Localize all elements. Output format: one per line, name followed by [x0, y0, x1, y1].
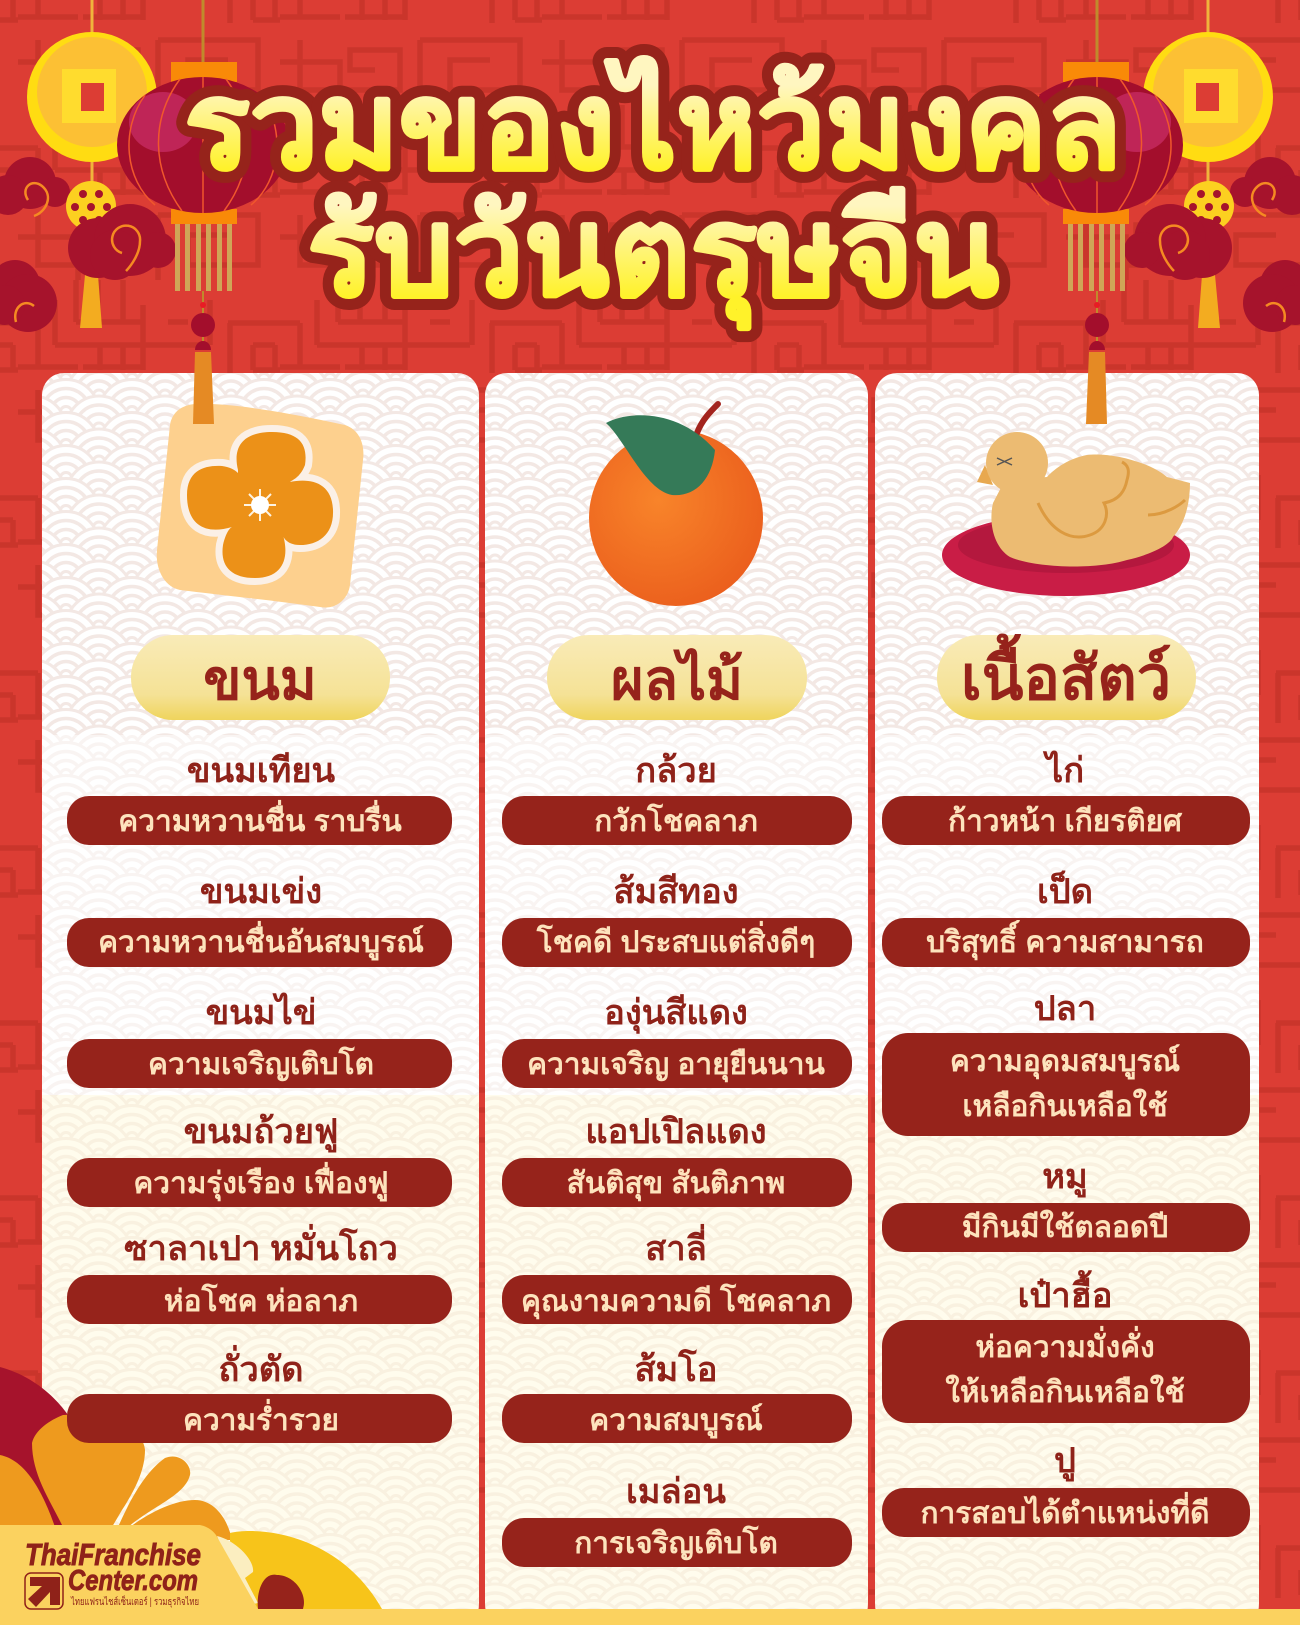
- item: เมล่อน: การเจริญเติบโต: [574, 1525, 778, 1561]
- logo: ThaiFranchise: [25, 1537, 201, 1572]
- item: ซาลาเปา หมั่นโถว: [67, 1223, 452, 1324]
- icon: orange: [589, 404, 763, 606]
- item: ขนมถ้วยฟู: ขนมถ้วยฟู: [184, 1113, 338, 1153]
- item: เมล่อน: [502, 1473, 852, 1567]
- title: รวมของไหว้มงคล: [184, 57, 1122, 194]
- item: หมู: มีกินมีใช้ตลอดปี: [962, 1209, 1168, 1244]
- item: ไก่: [882, 750, 1250, 845]
- item: แอปเปิลแดง: แอปเปิลแดง: [585, 1113, 767, 1151]
- item: ขนมถ้วยฟู: [67, 1113, 452, 1207]
- item: ส้มโอ: ความสมบูรณ์: [589, 1403, 763, 1439]
- item: เมล่อน: เมล่อน: [626, 1473, 726, 1511]
- hanging ornaments: left coin, lantern and clouds: [0, 0, 289, 424]
- decoration: flower corner: [0, 1367, 382, 1609]
- icon: boiled chicken on plate: [942, 432, 1190, 596]
- item: ขนมไข่: [67, 992, 452, 1088]
- bottom bar: [0, 1609, 1300, 1625]
- item: ส้มสีทอง: [502, 872, 852, 967]
- item: ขนมเทียน: ขนมเทียน: [187, 751, 336, 790]
- panel: meat background: [875, 373, 1259, 1625]
- item: ขนมไข่: ขนมไข่: [206, 992, 316, 1032]
- item: ขนมถ้วยฟู: ความรุ่งเรือง เฟื่องฟู: [133, 1161, 389, 1202]
- item: เป็ด: บริสุทธิ์ ความสามารถ: [926, 919, 1204, 960]
- item: กล้วย: กล้วย: [635, 752, 717, 790]
- item: ส้มโอ: [502, 1348, 852, 1443]
- item: ส้มโอ: ส้มโอ: [634, 1348, 718, 1389]
- item: ไก่: ก้าวหน้า เกียรติยศ: [948, 805, 1183, 838]
- item: เป๋าฮื้อ: [882, 1270, 1250, 1423]
- item: เป๋าฮื้อ: ให้เหลือกินเหลือใช้: [945, 1374, 1185, 1409]
- title: [184, 57, 1122, 330]
- heading: fruit: [547, 635, 807, 720]
- title: รวมของไหว้มงคล: [184, 57, 1122, 194]
- item: หมู: [882, 1158, 1250, 1252]
- item: ขนมเข่ง: [67, 873, 452, 967]
- title: รับวันตรุษจีน: [307, 183, 999, 330]
- item: ซาลาเปา หมั่นโถว: ห่อโชค ห่อลาภ: [164, 1283, 358, 1318]
- item: ส้มสีทอง: ส้มสีทอง: [613, 872, 739, 911]
- logo: Center.com: [68, 1565, 198, 1597]
- item: องุ่นสีแดง: ความเจริญ อายุยืนนาน: [527, 1048, 825, 1082]
- heading: sweets: ขนม: [203, 648, 317, 711]
- item: ส้มสีทอง: โชคดี ประสบแต่สิ่งดีๆ: [536, 920, 815, 959]
- item: องุ่นสีแดง: [502, 993, 852, 1088]
- item: เป็ด: เป็ด: [1037, 869, 1093, 911]
- hanging ornaments: right coin, lantern and clouds: [1011, 0, 1300, 424]
- panel: fruit background: [485, 373, 868, 1625]
- logo: [0, 1525, 258, 1625]
- icon: logo arrow: [25, 1573, 63, 1609]
- item: ปลา: [882, 990, 1250, 1136]
- item: ปู: ปู: [1054, 1442, 1076, 1482]
- heading: sweets: [131, 635, 390, 720]
- item: ถั่วตัด: [67, 1344, 452, 1443]
- item: ขนมเทียน: ความหวานชื่น ราบรื่น: [118, 799, 402, 838]
- item: ปลา: ความอุดมสมบูรณ์: [950, 1044, 1181, 1080]
- item: เป็ด: [882, 869, 1250, 967]
- heading: meat: เนื้อสัตว์: [961, 633, 1171, 712]
- panel: sweets background: [42, 373, 479, 1625]
- logo: ไทยแฟรนไชส์เซ็นเตอร์ | รวมธุรกิจไทย: [70, 1594, 199, 1608]
- item: ปลา: ปลา: [1034, 990, 1096, 1028]
- item: ปลา: เหลือกินเหลือใช้: [962, 1088, 1168, 1123]
- item: ขนมไข่: ความเจริญเติบโต: [148, 1046, 374, 1082]
- item: แอปเปิลแดง: สันติสุข สันติภาพ: [567, 1167, 785, 1201]
- item: กล้วย: กวักโชคลาภ: [594, 803, 758, 838]
- item: ปู: [882, 1442, 1250, 1537]
- item: ขนมเข่ง: ขนมเข่ง: [200, 873, 322, 911]
- item: ถั่วตัด: ความร่ำรวย: [183, 1398, 339, 1437]
- item: เป๋าฮื้อ: เป๋าฮื้อ: [1018, 1270, 1112, 1315]
- heading: fruit: ผลไม้: [611, 647, 743, 711]
- item: สาลี่: [502, 1223, 852, 1324]
- panel tint: cream lower area and light list area: [42, 735, 1259, 1625]
- item: กล้วย: [502, 752, 852, 845]
- item: สาลี่: สาลี่: [645, 1223, 707, 1268]
- item: ถั่วตัด: ถั่วตัด: [218, 1344, 304, 1389]
- heading: meat: [937, 633, 1196, 720]
- item: สาลี่: คุณงามความดี โชคลาภ: [521, 1283, 831, 1319]
- item: เป๋าฮื้อ: ห่อความมั่งคั่ง: [975, 1325, 1155, 1364]
- item: ขนมเข่ง: ความหวานชื่นอันสมบูรณ์: [98, 920, 424, 961]
- icon: mung bean cake: [157, 404, 363, 608]
- item: ไก่: ไก่: [1042, 750, 1084, 790]
- item: หมู: หมู: [1042, 1158, 1088, 1198]
- item: ขนมเทียน: [67, 751, 452, 845]
- item: ซาลาเปา หมั่นโถว: ซาลาเปา หมั่นโถว: [124, 1223, 398, 1268]
- item: องุ่นสีแดง: องุ่นสีแดง: [604, 993, 748, 1034]
- item: แอปเปิลแดง: [502, 1113, 852, 1207]
- title: รับวันตรุษจีน: [307, 183, 999, 330]
- item: ปู: การสอบได้ตำแหน่งที่ดี: [921, 1491, 1209, 1530]
